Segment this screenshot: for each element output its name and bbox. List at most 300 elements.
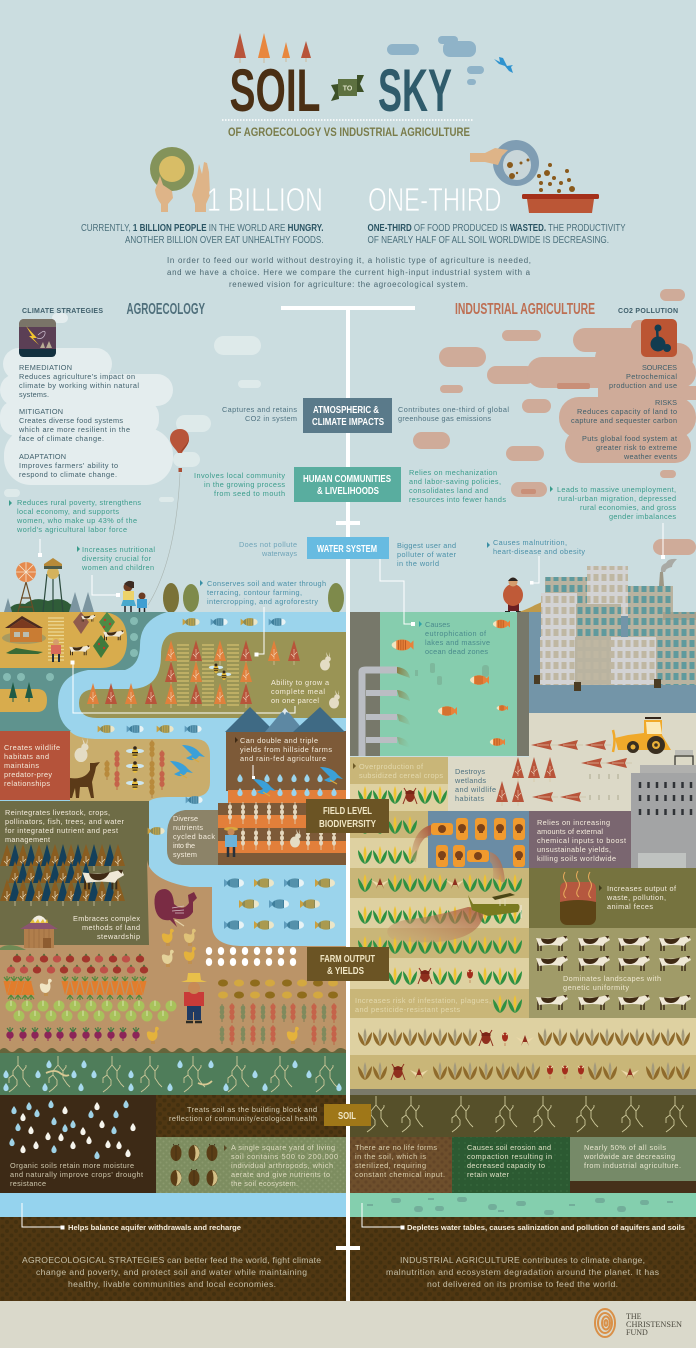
bottom soil right bbox=[350, 1203, 696, 1301]
roots bbox=[9, 1056, 337, 1092]
center divider top rule bbox=[281, 306, 415, 310]
cows bbox=[536, 936, 691, 1010]
corn rows bbox=[358, 786, 522, 1013]
cow bbox=[82, 870, 124, 889]
birds bbox=[170, 745, 205, 778]
rabbit bbox=[74, 738, 89, 762]
text: moisture: resistance bbox=[10, 1179, 46, 1188]
organic soil panel bbox=[0, 1095, 156, 1193]
diverse nutrients panel: cycled back bbox=[173, 832, 215, 841]
bushes bbox=[7, 599, 80, 612]
conifers on field bbox=[9, 682, 33, 702]
label: water system bbox=[307, 537, 389, 559]
callout: conservation: Conserves soil and water through bbox=[207, 579, 326, 588]
text: human right: and labor-saving policies, bbox=[409, 477, 501, 486]
concrete block bbox=[638, 853, 686, 877]
worms bbox=[46, 1071, 212, 1085]
leaders upper left bbox=[38, 539, 120, 597]
figure: obese man bbox=[503, 578, 523, 612]
stumps bbox=[590, 774, 618, 800]
callout: yields bbox=[235, 736, 332, 763]
callout: malnutrition: Causes malnutrition, bbox=[493, 538, 567, 547]
text: complete meal: complete meal bbox=[271, 687, 325, 696]
tomatoes bbox=[7, 954, 148, 974]
building block panel: reflection of community/ecological health bbox=[169, 1114, 317, 1123]
diverse nutrients panel: Diverse bbox=[173, 814, 198, 823]
panel: erosion: decreased capacity to bbox=[467, 1161, 545, 1170]
text: depletion: Depletes water tables, causes salinization and pollution of aquifers and soils bbox=[407, 1223, 685, 1232]
callout: rural poverty: women, who make up 43% of the bbox=[16, 516, 137, 525]
label: farm output and yields: & YIELDS bbox=[327, 965, 364, 977]
heading: agroecology: AGROECOLOGY bbox=[126, 301, 205, 318]
text: hunger line: ANOTHER BILLION OVER EAT UNHEALTHY FOODS. bbox=[125, 235, 324, 246]
callout: unemployment: gender imbalances bbox=[609, 512, 676, 521]
callout: unemployment bbox=[550, 485, 676, 521]
conclusion: agroecology: healthy, livable communities and local economies. bbox=[68, 1279, 276, 1289]
diverse nutrients panel bbox=[167, 810, 218, 865]
text: human left: Involves local community bbox=[194, 471, 285, 480]
bulldozer bbox=[613, 717, 671, 754]
yard bbox=[2, 632, 46, 644]
callout: nutrition: diversity crucial for bbox=[82, 554, 152, 563]
text: adaptation: respond to climate change. bbox=[19, 470, 117, 479]
conclusion: industrial bbox=[386, 1255, 659, 1289]
dark olive stewardship panel: management bbox=[5, 835, 50, 844]
leaders bbox=[71, 607, 295, 713]
bees bbox=[209, 664, 231, 680]
green root layer left bbox=[0, 1046, 346, 1095]
stat: 1 billion: 1 BILLION bbox=[207, 181, 323, 218]
house bbox=[5, 616, 43, 642]
text: remediation: REMEDIATION bbox=[19, 363, 72, 372]
river base bbox=[0, 612, 346, 952]
waste barrels bbox=[534, 675, 661, 691]
dark olive stewardship panel: for integrated nutrient and pest bbox=[5, 826, 118, 835]
wildlife red panel: relationships bbox=[4, 779, 50, 788]
conclusion: industrial: INDUSTRIAL AGRICULTURE contributes to climate change, bbox=[400, 1255, 645, 1265]
icon: wasted food plate and basin bbox=[470, 140, 599, 213]
panel: erosion: retain water bbox=[467, 1170, 510, 1179]
diverse nutrients panel: system bbox=[173, 850, 197, 859]
text: water right: polluter of water bbox=[397, 550, 457, 559]
label: field level biodiversity: FIELD LEVEL bbox=[323, 805, 372, 817]
text: adaptation bbox=[19, 452, 118, 479]
divider tick upper bbox=[336, 521, 360, 525]
cabbages bbox=[6, 1000, 176, 1022]
text: atmospheric comparison right bbox=[398, 405, 509, 423]
text: water right: Biggest user and bbox=[397, 541, 456, 550]
text: water right bbox=[397, 541, 457, 568]
windows bbox=[640, 782, 691, 815]
text: wetlands: and wildlife bbox=[455, 785, 496, 794]
logo: the christensen fund bbox=[595, 1309, 682, 1337]
wordmark: THE bbox=[626, 1312, 642, 1321]
roots bbox=[367, 1096, 687, 1132]
text: water left: Does not pollute bbox=[239, 540, 297, 549]
city buildings bbox=[540, 559, 696, 685]
figure: girl bbox=[121, 581, 136, 612]
wordmark bbox=[626, 1312, 682, 1337]
icon: sky clouds and plane bbox=[387, 36, 513, 85]
callout: rural poverty: world's agricultural labor force bbox=[16, 525, 127, 534]
center divider bottom tick bbox=[336, 1246, 360, 1250]
aquifer band left bbox=[0, 1193, 346, 1217]
rooster bbox=[154, 889, 197, 927]
agroecology landscape bbox=[0, 612, 346, 1050]
text: wetlands: habitats bbox=[455, 794, 484, 803]
dark olive stewardship panel: pollinators, fish, trees, and water bbox=[5, 817, 125, 826]
text: arthropods: soil contains 500 to 200,000 bbox=[231, 1152, 338, 1161]
chemical drums panel bbox=[428, 811, 529, 868]
label: atmospheric and climate impacts bbox=[303, 398, 392, 433]
panel: co2 pollution bbox=[571, 308, 678, 461]
callout: rural poverty: Reduces rural poverty, strengthens bbox=[17, 498, 141, 507]
text: risks bbox=[571, 398, 677, 461]
diverse nutrients panel: nutrients bbox=[173, 823, 203, 832]
text: risks: greater risk to extreme bbox=[596, 443, 677, 452]
text: human right: consolidates land and bbox=[409, 486, 488, 495]
icon: title trees bbox=[234, 33, 311, 63]
intro text: and we have a choice. Here we compare the current high-input industrial system with a bbox=[167, 268, 531, 277]
text: pests bbox=[355, 996, 491, 1014]
dark olive stewardship panel: methods of land bbox=[82, 923, 140, 932]
text: remediation bbox=[19, 363, 139, 399]
purple chemical inputs panel: Relies on increasing bbox=[537, 818, 610, 827]
wordmark: CHRISTENSEN bbox=[626, 1320, 682, 1329]
text: pests: Increases risk of infestation, plagues, bbox=[355, 996, 491, 1005]
wildlife red panel: Creates wildlife bbox=[4, 743, 60, 752]
callout: conservation: intercropping, and agroforestry bbox=[207, 597, 318, 606]
wildlife red panel bbox=[0, 731, 70, 800]
text: risks: RISKS bbox=[655, 398, 677, 407]
left village on horizon bbox=[4, 558, 344, 613]
corn bands bbox=[350, 757, 696, 1095]
subtitle: OF AGROECOLOGY VS INDUSTRIAL AGRICULTURE bbox=[228, 127, 470, 139]
conclusion: industrial: not delivered on its promise to feed the world. bbox=[427, 1279, 618, 1289]
label: human communities and livelihoods: HUMAN COMMUNITIES bbox=[303, 473, 391, 485]
bottom soil left bbox=[0, 1203, 346, 1301]
icon: storm bbox=[19, 319, 56, 357]
terrace panel bbox=[218, 790, 346, 865]
text: mitigation bbox=[18, 407, 130, 443]
text: risks: capture and sequester carbon bbox=[571, 416, 677, 425]
callout: nutrition: Increases nutritional bbox=[82, 545, 155, 554]
deer bbox=[70, 762, 100, 798]
text: waste: waste, pollution, bbox=[606, 893, 666, 902]
left sky clouds bbox=[0, 313, 261, 502]
text: human left: from seed to mouth bbox=[214, 489, 285, 498]
green hill bbox=[0, 945, 26, 950]
panel: no life forms: constant chemical input. bbox=[355, 1170, 445, 1179]
chemical sludge flows bbox=[411, 825, 505, 882]
small yellow field bbox=[0, 689, 47, 712]
footer background bbox=[0, 1301, 696, 1348]
fish bbox=[392, 620, 510, 746]
cows bbox=[69, 615, 124, 655]
text: waste line: ONE-THIRD OF FOOD PRODUCED IS WASTED. THE PRODUCTIVITY bbox=[368, 223, 626, 234]
bank trees bbox=[3, 617, 138, 681]
text: water left: waterways bbox=[261, 549, 297, 558]
drops bbox=[9, 1100, 136, 1159]
text: arthropods: the soil ecosystem. bbox=[231, 1179, 298, 1188]
label: field level biodiversity bbox=[306, 799, 389, 833]
text: moisture: Organic soils retain more moisture bbox=[10, 1161, 134, 1170]
label: atmospheric and climate impacts: ATMOSPHERIC & bbox=[313, 404, 379, 416]
text: waste bbox=[599, 884, 677, 911]
forest with cow bbox=[0, 844, 125, 950]
yellow farm field bbox=[0, 612, 127, 668]
conclusion: agroecology: change and poverty, and protect soil and water while maintaining bbox=[36, 1267, 307, 1277]
algae marks bbox=[415, 663, 489, 685]
text: complete meal bbox=[271, 678, 330, 705]
callout: malnutrition bbox=[487, 538, 585, 556]
text: complete meal: Ability to grow a bbox=[271, 678, 330, 687]
label: field level biodiversity: BIODIVERSITY bbox=[319, 818, 376, 830]
text: human right bbox=[409, 468, 506, 504]
grain rows bbox=[220, 1003, 337, 1045]
carrots bbox=[4, 976, 146, 1000]
dark olive stewardship panel: Reintegrates livestock, crops, bbox=[5, 808, 110, 817]
text: atmospheric comparison right: greenhouse gas emissions bbox=[398, 414, 491, 423]
callout: nutrition: women and children bbox=[81, 563, 154, 572]
rabbit bbox=[290, 829, 301, 848]
farmer with hat bbox=[181, 973, 207, 1022]
conifers bbox=[4, 592, 94, 612]
text: sources: SOURCES bbox=[642, 363, 677, 372]
building block panel bbox=[156, 1095, 346, 1137]
text: human right: resources into fewer hands bbox=[409, 495, 506, 504]
horizon trees bbox=[163, 583, 344, 613]
callout: malnutrition: heart-disease and obesity bbox=[493, 547, 585, 556]
title word: sky: SKY bbox=[378, 57, 452, 124]
wildlife field contents bbox=[70, 738, 205, 798]
ribbon: to: TO bbox=[343, 86, 353, 92]
drums bbox=[431, 818, 525, 867]
tan wildlife field bbox=[70, 731, 210, 801]
industrial water and city bbox=[350, 559, 696, 756]
chicks bbox=[40, 929, 299, 1044]
text: remediation: Reduces agriculture's impact on bbox=[19, 372, 135, 381]
panel: one third bbox=[368, 140, 626, 246]
text: sources bbox=[609, 363, 677, 390]
diverse nutrients panel: into the bbox=[173, 841, 195, 850]
text: complete meal: on one parcel bbox=[271, 696, 319, 705]
lower river fish bbox=[224, 878, 335, 930]
heading: industrial agriculture: INDUSTRIAL AGRICULTURE bbox=[455, 301, 595, 318]
callout: conservation: terracing, contour farming, bbox=[207, 588, 302, 597]
panel: fifty percent bbox=[570, 1137, 696, 1193]
crop field trees and bees bbox=[71, 607, 340, 713]
heading: co2 pollution: CO2 POLLUTION bbox=[618, 308, 678, 315]
water drops bbox=[237, 774, 337, 796]
panel: no life forms: There are no life forms bbox=[355, 1143, 437, 1152]
dotted rule bbox=[222, 119, 474, 121]
text: hunger line bbox=[81, 223, 324, 246]
icon: molecule bbox=[641, 319, 677, 357]
text: aquifer: Helps balance aquifer withdrawals and recharge bbox=[68, 1223, 241, 1232]
text: atmospheric comparison left bbox=[222, 405, 297, 423]
label: human communities and livelihoods bbox=[294, 467, 401, 502]
text: arthropods bbox=[224, 1143, 338, 1188]
callout: unemployment: rural economies, and gross bbox=[580, 503, 676, 512]
dark olive stewardship panel bbox=[0, 801, 149, 945]
text: risks: Reduces capacity of land to bbox=[577, 407, 677, 416]
callout: yields: yields from hillside farms bbox=[240, 745, 332, 754]
farmstead bbox=[2, 612, 138, 702]
text: water right: in the world bbox=[397, 559, 439, 568]
text: hunger line: CURRENTLY, 1 BILLION PEOPLE IN THE WORLD ARE HUNGRY. bbox=[81, 223, 324, 234]
callout: rural poverty bbox=[9, 498, 141, 534]
lake walls bbox=[350, 612, 529, 756]
text: atmospheric comparison left: Captures and retains bbox=[222, 405, 297, 414]
balloon bbox=[148, 429, 189, 605]
text: eutrophication: Causes bbox=[425, 620, 450, 629]
panel: fifty percent: from industrial agriculture. bbox=[584, 1161, 681, 1170]
text: arthropods: aerate and give nutrients to bbox=[231, 1170, 330, 1179]
divider and water leader bbox=[380, 523, 665, 626]
panel: no life forms: in the soil, which is bbox=[355, 1152, 426, 1161]
wildlife red panel: habitats and bbox=[4, 752, 49, 761]
panel: 1 billion bbox=[81, 147, 324, 246]
manure pit bbox=[560, 871, 596, 925]
river fish top bbox=[98, 618, 286, 835]
text: arthropods: A single square yard of living bbox=[231, 1143, 335, 1152]
label: farm output and yields bbox=[307, 947, 389, 981]
panel: erosion bbox=[452, 1137, 570, 1193]
orchard trees bbox=[73, 612, 115, 658]
text: overproduction: Overproduction of bbox=[359, 762, 424, 771]
hedge bbox=[6, 648, 43, 654]
arthropods panel bbox=[156, 1137, 346, 1193]
heading: climate strategies: CLIMATE STRATEGIES bbox=[22, 308, 103, 315]
panel: erosion: Causes soil erosion and bbox=[467, 1143, 551, 1152]
purple chemical inputs panel: chemical inputs to boost bbox=[537, 836, 626, 845]
biplane bbox=[468, 893, 521, 918]
panel: no life forms: sterilized, requiring bbox=[355, 1161, 426, 1170]
building block panel: Treats soil as the building block and bbox=[187, 1105, 317, 1114]
eggs bbox=[206, 947, 296, 966]
aquifer band right bbox=[350, 1193, 696, 1217]
panel: erosion: compaction resulting in bbox=[467, 1152, 552, 1161]
standing trees bbox=[496, 757, 556, 806]
conclusion: agroecology bbox=[22, 1255, 321, 1289]
icon: water tower bbox=[43, 558, 63, 612]
crop duster bbox=[387, 893, 521, 942]
text: sources: Petrochemical bbox=[626, 372, 677, 381]
stat: one-third: ONE-THIRD bbox=[368, 181, 502, 218]
label: atmospheric and climate impacts: CLIMATE IMPACTS bbox=[312, 416, 384, 428]
text: remediation: climate by working within natural bbox=[19, 381, 139, 390]
text: wetlands: wetlands bbox=[454, 776, 486, 785]
text: human right: Relies on mechanization bbox=[409, 468, 497, 477]
callout: unemployment: Leads to massive unemployment, bbox=[557, 485, 676, 494]
mountains bbox=[225, 707, 345, 732]
squash bbox=[218, 980, 338, 998]
callout: yields: Can double and triple bbox=[240, 736, 318, 745]
dead crop rows bbox=[358, 1028, 690, 1080]
text: arthropods: individual arthropods, which bbox=[231, 1161, 333, 1170]
purple chemical inputs panel: unsustainable yields, bbox=[537, 845, 611, 854]
center divider line bbox=[346, 308, 350, 1301]
text: eutrophication: eutrophication of bbox=[425, 629, 487, 638]
hillside brown panel bbox=[226, 731, 346, 791]
text: atmospheric comparison left: CO2 in system bbox=[245, 414, 297, 423]
text: adaptation: ADAPTATION bbox=[19, 452, 66, 461]
text: risks: weather events bbox=[623, 452, 677, 461]
conclusion: industrial: malnutrition and ecosystem degradation around the planet. It has bbox=[386, 1267, 659, 1277]
wildlife red panel: maintains bbox=[4, 761, 39, 770]
text: waste line: OF NEARLY HALF OF ALL SOIL WORLDWIDE IS DECREASING. bbox=[368, 235, 609, 246]
label: water system: WATER SYSTEM bbox=[317, 543, 377, 555]
callout: conservation bbox=[200, 579, 326, 606]
cattle panel bbox=[529, 928, 696, 1018]
beetles bbox=[170, 1144, 218, 1186]
text: uniformity: genetic uniformity bbox=[563, 983, 629, 992]
text: human left bbox=[194, 471, 285, 498]
wheat terrace bbox=[228, 802, 336, 850]
conclusion: agroecology: AGROECOLOGICAL STRATEGIES can better feed the world, fight climate bbox=[22, 1255, 321, 1265]
text: wetlands bbox=[454, 767, 496, 803]
callout: nutrition bbox=[77, 545, 155, 572]
label: farm output and yields: FARM OUTPUT bbox=[320, 953, 375, 965]
tree rows bbox=[0, 844, 125, 906]
right pollution clouds bbox=[413, 289, 696, 555]
birds bbox=[253, 767, 343, 796]
text: sources: production and use bbox=[609, 381, 677, 390]
beets bbox=[6, 1027, 140, 1041]
ground bbox=[448, 713, 696, 811]
wordmark: FUND bbox=[626, 1328, 648, 1337]
dark olive stewardship panel: Embraces complex bbox=[73, 914, 140, 923]
text: adaptation: Improves farmers' ability to bbox=[19, 461, 118, 470]
drain pipes bbox=[362, 667, 410, 756]
rabbits bbox=[320, 652, 340, 708]
straw rows bbox=[48, 618, 64, 660]
hillside panel contents bbox=[224, 736, 343, 857]
background harbor bbox=[529, 612, 696, 713]
wildlife red panel: predator-prey bbox=[4, 770, 52, 779]
wheat bbox=[104, 740, 165, 798]
hut bbox=[20, 916, 58, 948]
text: moisture: and naturally improve crops' drought bbox=[10, 1170, 143, 1179]
mud mound bbox=[519, 602, 542, 612]
figure: boy bbox=[137, 592, 147, 612]
panel: no life forms bbox=[350, 1137, 452, 1193]
farmer bbox=[51, 638, 61, 662]
text: overproduction: subsidized cereal crops bbox=[359, 771, 443, 780]
text: overproduction bbox=[353, 762, 443, 780]
text: eutrophication: ocean dead zones bbox=[425, 647, 488, 656]
text: moisture bbox=[10, 1161, 143, 1188]
panel: fifty percent: Nearly 50% of all soils bbox=[584, 1143, 666, 1152]
purple chemical inputs panel: amounts of external bbox=[537, 827, 603, 836]
text: human left: in the growing process bbox=[204, 480, 285, 489]
text: eutrophication: lakes and massive bbox=[425, 638, 490, 647]
panel: climate strategies bbox=[18, 308, 139, 479]
callout: yields: and rain-fed agriculture bbox=[240, 754, 326, 763]
icon: empty plate and hands bbox=[150, 147, 210, 212]
leader bbox=[22, 1203, 64, 1229]
text: mitigation: Creates diverse food systems bbox=[19, 416, 123, 425]
text: pests: and pesticide-resistant pests bbox=[355, 1005, 460, 1014]
dark olive stewardship panel: stewardship bbox=[97, 932, 140, 941]
purple chemical inputs panel bbox=[529, 811, 631, 868]
text: risks: Puts global food system at bbox=[582, 434, 677, 443]
waste panel bbox=[529, 868, 696, 928]
callout: unemployment: rural-urban migration, depressed bbox=[558, 494, 676, 503]
factory building bbox=[631, 750, 696, 877]
polluted lake bbox=[380, 612, 517, 756]
